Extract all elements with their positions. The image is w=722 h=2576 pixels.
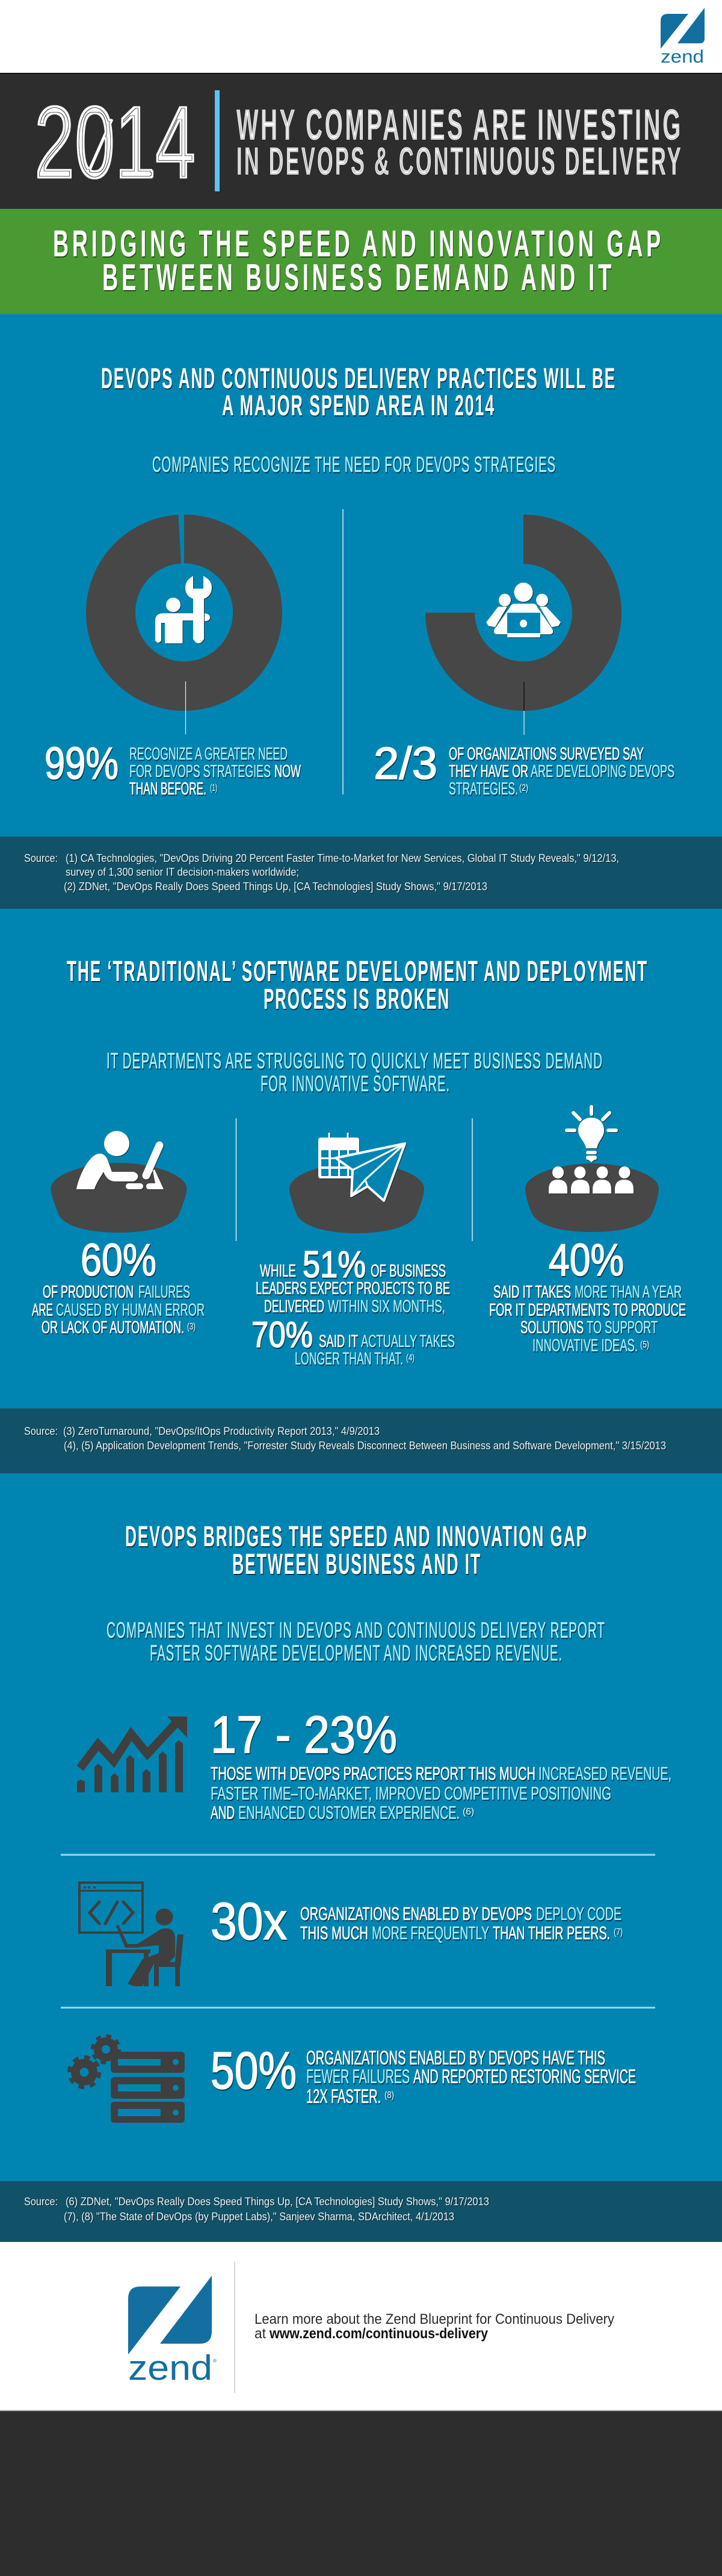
source text: (4), (5) Application Development Trends, "Forrester Study Reveals Disconnect Between Business and Software Development," 3/15/2013 — [64, 1440, 666, 1452]
source text: (1) CA Technologies, "DevOps Driving 20 Percent Faster Time-to-Market for New Services, Global IT Study Reveals," 9/12/13, — [66, 852, 619, 864]
stat: 2/3: THEY HAVE OR — [449, 762, 528, 781]
source text: (2) ZDNet, "DevOps Really Does Speed Things Up, [CA Technologies] Study Shows," 9/17/2013 — [64, 881, 487, 893]
subheading — [106, 1618, 605, 1665]
stat: 17 - 23%: 17 - 23% — [211, 1706, 397, 1764]
source text: (6) ZDNet, "DevOps Really Does Speed Things Up, [CA Technologies] Study Shows," 9/17/2013 — [66, 2196, 489, 2208]
stat: 51% and 70%: OF BUSINESS — [371, 1262, 446, 1281]
stat: 60% — [32, 1234, 205, 1337]
icon: team around laptop — [486, 583, 561, 637]
stat: 60%: FAILURES — [138, 1283, 190, 1302]
stat: 30x: THIS MUCH — [300, 1922, 368, 1943]
stat: 99%: RECOGNIZE A GREATER NEED — [129, 745, 288, 764]
stat: 2/3: 2/3 — [374, 738, 437, 788]
icon: zend logo large: zend — [128, 2348, 212, 2388]
year 2014: 2014 — [34, 85, 196, 200]
icon: gears and servers — [69, 2036, 185, 2123]
stat: 2/3 — [374, 738, 674, 799]
heading — [125, 1521, 588, 1581]
stat: 2/3: STRATEGIES. — [449, 779, 518, 799]
panel: sources 1 — [0, 837, 722, 909]
panel: section 3 devops bridges the gap — [0, 1473, 722, 2181]
icon: person at laptop on bowl — [51, 1131, 187, 1233]
stat: 60%: 60% — [81, 1234, 156, 1285]
stat: 40%: (5) — [640, 1340, 649, 1350]
source text: Source: — [24, 852, 58, 864]
stat: 40%: SAID IT TAKES — [493, 1283, 571, 1302]
source text: survey of 1,300 senior IT decision-makers worldwide; — [66, 866, 299, 878]
stat: 50%: 50% — [211, 2042, 297, 2100]
stat: 30x: MORE FREQUENTLY — [372, 1922, 489, 1943]
accent bar — [215, 90, 220, 191]
stat: 2/3: (2) — [519, 783, 528, 793]
subheading: FOR INNOVATIVE SOFTWARE. — [261, 1071, 450, 1096]
stat: 99%: THAN BEFORE. — [129, 779, 206, 799]
divider — [61, 2006, 655, 2008]
stat: 50%: (8) — [384, 2090, 394, 2101]
stat: 99%: FOR DEVOPS STRATEGIES — [129, 762, 271, 781]
stat: 60%: CAUSED BY HUMAN ERROR — [56, 1301, 205, 1320]
stat: 30x: ORGANIZATIONS ENABLED BY DEVOPS — [300, 1903, 532, 1924]
stat: 30x — [211, 1892, 623, 1951]
stat: 51% and 70%: (4) — [406, 1353, 415, 1363]
icon: person with wrench — [155, 576, 212, 643]
stat: 17 - 23%: (6) — [463, 1807, 474, 1817]
stat: 51% and 70%: 70% — [251, 1314, 313, 1355]
stat: 30x: DEPLOY CODE — [536, 1903, 622, 1924]
stat: 17 - 23%: ENHANCED CUSTOMER EXPERIENCE. — [238, 1802, 460, 1823]
stat: 60%: ARE — [32, 1301, 53, 1320]
heading — [67, 956, 648, 1015]
stat: 17 - 23%: THOSE WITH DEVOPS PRACTICES REPORT THIS MUCH — [211, 1763, 535, 1784]
stat: 50%: FEWER FAILURES — [306, 2066, 410, 2087]
stat: 50% — [211, 2042, 636, 2107]
stat: 30x: (7) — [614, 1927, 623, 1937]
panel: white top bar with logo — [0, 0, 722, 73]
icon: zend logo large: ® — [213, 2358, 217, 2364]
panel: section 2 traditional process broken — [0, 909, 722, 1408]
icon: calendar and paper plane on bowl — [289, 1133, 424, 1233]
stat: 30x: 30x — [211, 1892, 287, 1951]
stat: 51% and 70%: WHILE — [260, 1262, 296, 1281]
panel: dark footer band — [0, 2410, 722, 2576]
panel: section 1 spend area — [0, 314, 722, 837]
call to action text — [255, 2311, 614, 2342]
stat: 51% and 70%: LONGER THAN THAT. — [295, 1349, 403, 1369]
icon: zend logo top right — [661, 8, 705, 67]
source text: Source: — [24, 1425, 58, 1437]
footer divider — [234, 2262, 235, 2393]
stat: 51% and 70%: ACTUALLY TAKES — [361, 1332, 455, 1351]
icon: light bulb and team on bowl — [525, 1107, 659, 1232]
stat: 51% and 70%: 51% — [303, 1244, 366, 1286]
panel: footer call to action — [0, 2242, 722, 2410]
stat: 51% and 70%: WITHIN SIX MONTHS, — [328, 1297, 445, 1316]
heading — [101, 363, 616, 422]
panel: dark title band — [0, 73, 722, 209]
stat: 40%: INNOVATIVE IDEAS. — [532, 1336, 638, 1355]
icon: zend logo large — [128, 2276, 217, 2388]
stat: 51% and 70%: DELIVERED — [264, 1297, 324, 1316]
source text: (7), (8) "The State of DevOps (by Puppet Labs)," Sanjeev Sharma, SDArchitect, 4/1/2013 — [64, 2211, 454, 2223]
stat: 99%: NOW — [274, 762, 301, 781]
stat: 30x: THAN THEIR PEERS. — [493, 1922, 610, 1943]
panel: green subtitle band — [0, 209, 722, 314]
stat: 51% and 70% — [251, 1244, 455, 1369]
stat: 17 - 23%: AND — [211, 1802, 235, 1823]
divider — [61, 1853, 655, 1856]
chart: two thirds donut — [425, 515, 622, 735]
heading: PROCESS IS BROKEN — [264, 983, 450, 1015]
stat: 51% and 70%: LEADERS EXPECT PROJECTS TO BE — [256, 1279, 450, 1298]
stat: 40%: SOLUTIONS — [520, 1318, 584, 1337]
icon: zend logo top right: zend — [661, 47, 704, 67]
subtitle — [53, 223, 664, 299]
icon: rising chart — [77, 1717, 187, 1792]
source text — [24, 1425, 666, 1452]
column dividers — [236, 1118, 472, 1241]
column divider — [342, 509, 344, 794]
stat: 99% — [45, 738, 301, 799]
chart: 99% donut — [111, 512, 258, 734]
source text: (3) ZeroTurnaround, "DevOps/ItOps Productivity Report 2013," 4/9/2013 — [63, 1425, 380, 1437]
stat: 60%: (3) — [187, 1322, 196, 1332]
source text — [24, 852, 619, 893]
panel: sources 3 — [0, 2181, 722, 2242]
stat: 60%: OR LACK OF AUTOMATION. — [42, 1318, 184, 1337]
stat: 51% and 70%: SAID IT — [319, 1332, 358, 1351]
stat: 50%: 12X FASTER. — [306, 2085, 381, 2107]
stat: 99%: 99% — [45, 738, 119, 788]
source text: Source: — [24, 2196, 58, 2208]
stat: 40%: TO SUPPORT — [587, 1318, 658, 1337]
stat: 40% — [489, 1234, 686, 1355]
panel: sources 2 — [0, 1408, 722, 1473]
stat: 99%: (1) — [210, 783, 217, 793]
icon: developer at desk — [78, 1881, 184, 1986]
heading: BETWEEN BUSINESS AND IT — [232, 1549, 481, 1581]
stat: 17 - 23% — [211, 1706, 671, 1823]
call to action text: Learn more about the Zend Blueprint for Continuous Delivery — [255, 2311, 614, 2327]
stat: 40%: 40% — [549, 1234, 624, 1285]
heading: A MAJOR SPEND AREA IN 2014 — [222, 390, 495, 422]
source text — [24, 2196, 489, 2223]
stat: 60%: OF PRODUCTION — [43, 1283, 134, 1302]
subheading — [106, 1048, 603, 1096]
call to action text: www.zend.com/continuous-delivery — [269, 2326, 489, 2342]
call to action text: at — [255, 2326, 266, 2342]
main title — [236, 101, 683, 183]
